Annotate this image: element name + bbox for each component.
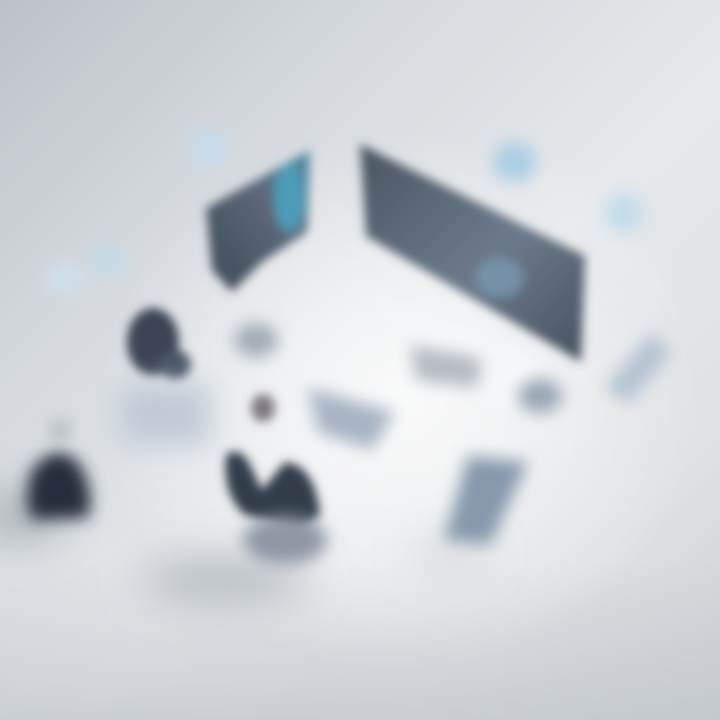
chart: blue detail on right monitor	[476, 258, 524, 298]
device: tablet below right monitor	[410, 345, 482, 388]
icon: teal highlight on left monitor	[274, 164, 304, 232]
device: small dark item right	[518, 379, 562, 413]
device: small grey item centre	[234, 323, 278, 357]
person: far left dark figure	[27, 420, 90, 520]
decorative white arcs	[520, 165, 660, 300]
icon: floating blue circle right	[604, 193, 644, 233]
person: centre figure head	[251, 394, 275, 422]
lower edge shading	[0, 560, 720, 720]
panel: left monitor	[206, 150, 310, 292]
central glow	[100, 130, 700, 670]
device: pale blue blocks under left figure	[120, 385, 210, 445]
device: phone lower right	[444, 456, 528, 545]
floor shadow	[0, 489, 486, 600]
device: keyboard centre	[308, 388, 395, 450]
device: tablet far right	[604, 332, 672, 404]
person: centre figure legs	[243, 516, 327, 564]
person: centre figure body	[225, 452, 320, 530]
icon: floating blue circle top left	[188, 128, 228, 168]
icon: floating blue cluster left	[48, 244, 126, 293]
person: left dark figure	[127, 308, 191, 380]
icon: floating blue circle top right	[493, 142, 537, 182]
panel: right monitor	[360, 144, 585, 362]
device: white laptop base below right monitor	[380, 300, 540, 410]
